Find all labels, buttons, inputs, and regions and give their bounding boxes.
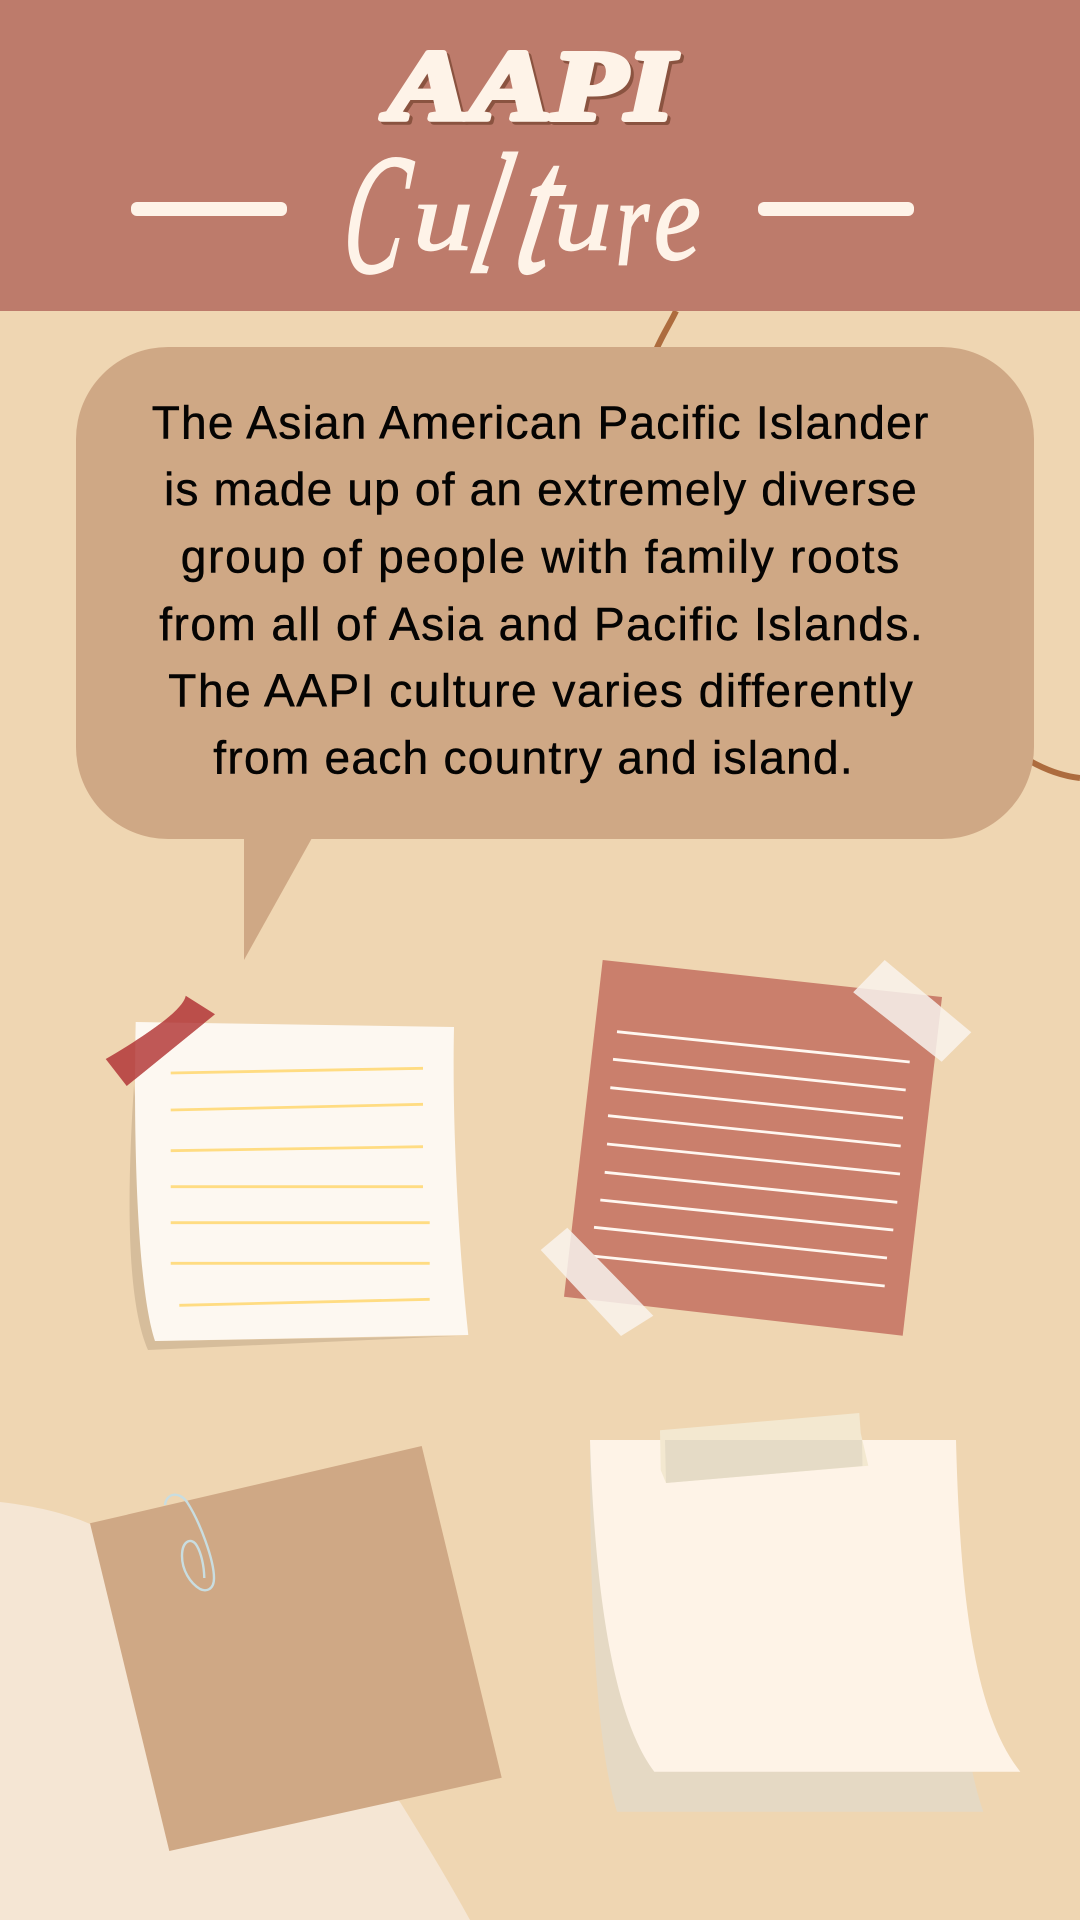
title rule: right xyxy=(758,202,914,216)
note sheet xyxy=(135,1022,468,1341)
cream note shadow xyxy=(590,1445,983,1812)
speech bubble xyxy=(76,347,1034,960)
terracotta sheet xyxy=(564,960,942,1336)
note: terracotta lined paper with clear tape xyxy=(541,960,971,1336)
title: Culture: l xyxy=(458,120,527,309)
intro text xyxy=(152,396,928,783)
title: Culture: C xyxy=(334,120,419,309)
intro text: The AAPI culture varies differently xyxy=(168,665,913,717)
tan sheet xyxy=(90,1446,502,1851)
icon: paperclip xyxy=(165,1495,214,1590)
red tape xyxy=(106,996,215,1086)
note: white lined paper with red tape xyxy=(106,996,468,1350)
title: AAPI: AAPI xyxy=(381,30,678,141)
note shadow xyxy=(130,1085,457,1350)
brown curve behind bubble: top xyxy=(656,311,676,350)
title: Culture: t xyxy=(503,107,578,312)
intro text: group of people with family roots xyxy=(181,530,899,582)
title: Culture: u xyxy=(413,165,473,270)
note: tan paper with paperclip xyxy=(90,1446,502,1851)
title: Culture: e xyxy=(654,148,701,287)
title: Culture: r xyxy=(616,153,649,292)
title: Culture: u xyxy=(554,165,612,270)
title: Culture xyxy=(334,107,701,312)
note: cream curled paper with tape xyxy=(590,1413,1020,1812)
title rule: left xyxy=(131,202,287,216)
note ruled lines xyxy=(171,1068,430,1305)
intro text: from all of Asia and Pacific Islands. xyxy=(159,598,923,650)
cream sheet xyxy=(590,1440,1020,1772)
white ruled lines xyxy=(592,1032,910,1286)
brown curve behind bubble: right xyxy=(1030,761,1080,778)
intro text: The Asian American Pacific Islander xyxy=(152,396,928,448)
clear tape: top right xyxy=(853,960,971,1062)
masking tape xyxy=(660,1413,868,1483)
header band xyxy=(0,0,1080,311)
intro text: from each country and island. xyxy=(213,731,853,783)
background blob: bottom left xyxy=(0,1502,470,1920)
clear tape: bottom left xyxy=(541,1228,653,1336)
intro text: is made up of an extremely diverse xyxy=(164,463,917,515)
